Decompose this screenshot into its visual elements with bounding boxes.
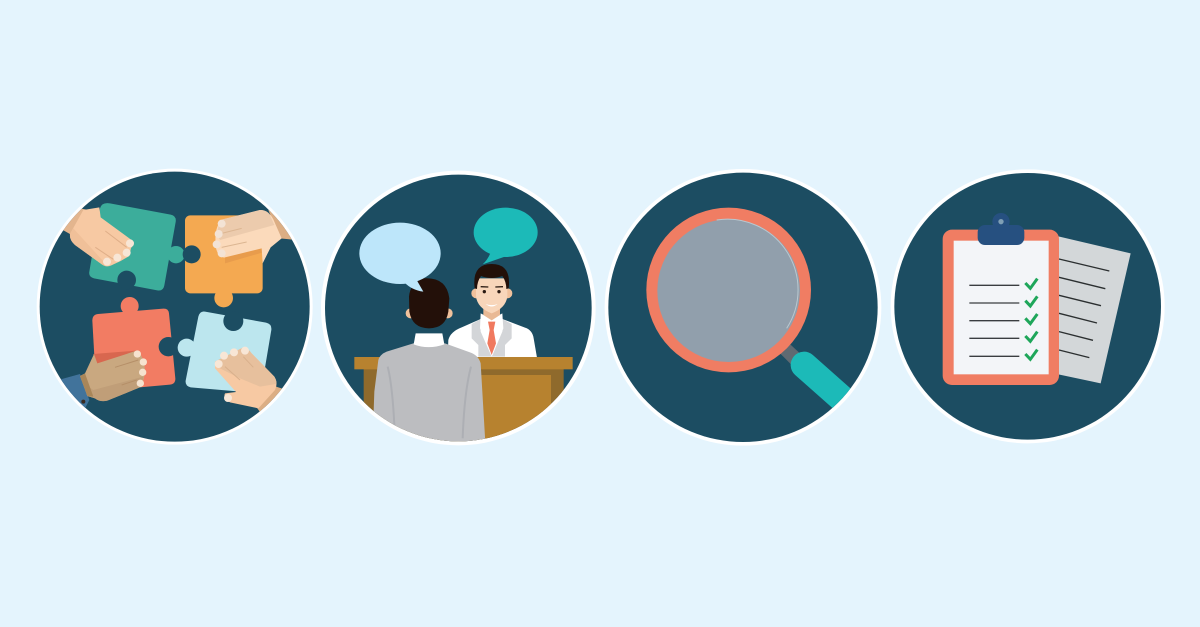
puzzle piece: green: [89, 203, 185, 290]
desk: [354, 357, 573, 445]
hand: top right: [213, 210, 297, 263]
hand: bottom left with blue cuff: [58, 350, 147, 408]
speech bubble: light blue: [359, 223, 441, 292]
hand: bottom right: [214, 346, 282, 412]
puzzle piece: coral: [92, 297, 178, 391]
candidate seen from behind: [372, 278, 486, 448]
panel: magnifying glass: [605, 169, 881, 446]
speech bubble: teal: [474, 208, 538, 264]
panel: clipboard checklist: [891, 169, 1165, 443]
panel: puzzle pieces and hands: [37, 169, 313, 445]
magnifier lens: [646, 208, 811, 372]
clipboard: [943, 213, 1059, 385]
interviewer: [448, 264, 537, 358]
hand: top left: [60, 207, 134, 266]
clip: [978, 213, 1024, 245]
check marks: [1025, 279, 1037, 359]
magnifier handle: [780, 344, 850, 408]
puzzle piece: light blue: [178, 311, 271, 393]
back paper: [1058, 236, 1131, 383]
illustration row: [36, 168, 1164, 446]
checklist lines: [969, 285, 1019, 356]
puzzle piece: orange: [183, 215, 263, 307]
panel: interview at desk: [321, 171, 596, 448]
